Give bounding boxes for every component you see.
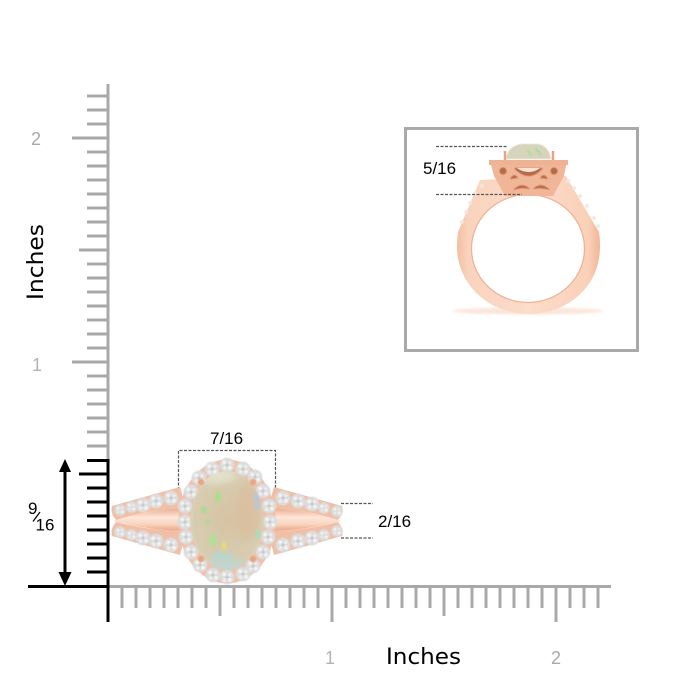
inner band edge: [472, 194, 584, 302]
dimension lines: [436, 146, 522, 194]
axis numbers: 1: [32, 355, 42, 375]
opal stone: [190, 468, 264, 573]
dimension: stone width: 7/16: [210, 429, 243, 448]
halo rim: [489, 160, 568, 165]
gallery arc highlight: [517, 168, 540, 172]
dimension: stone width: [178, 429, 276, 490]
vertical ruler: grey section: [72, 84, 108, 460]
label: ring height 9/16: [28, 499, 54, 534]
arrow: ring height: [58, 459, 72, 586]
label: ring height 9/16: 16: [36, 516, 54, 534]
ring band side view: [457, 176, 600, 314]
axis numbers: 2: [551, 648, 561, 668]
axis numbers: 1: [325, 648, 335, 668]
axis numbers: 2: [31, 129, 41, 149]
side diamonds: [460, 179, 600, 228]
axis numbers: [31, 129, 561, 668]
halo: [178, 458, 277, 584]
split shank, right: [268, 487, 342, 555]
shank diamonds: [114, 491, 343, 552]
horizontal ruler: [108, 586, 611, 622]
prongs: [198, 479, 256, 562]
axis title: horizontal Inches: Inches: [386, 645, 461, 670]
split shank, left: [112, 487, 186, 555]
head gallery: [490, 161, 567, 196]
opal side view: [506, 144, 551, 159]
prongs side view: [505, 151, 553, 161]
label 5/16: 5/16: [423, 159, 456, 178]
main ring: front view: [112, 458, 343, 584]
vertical ruler: black section marking ring height: [28, 459, 108, 622]
label: ring height 9/16: 9: [28, 499, 37, 518]
gallery cutouts: [500, 168, 558, 190]
panel: side view inset: [406, 128, 638, 350]
dimension: band width: [341, 504, 411, 538]
ground shadow: [452, 308, 604, 314]
dimension: band width: 2/16: [378, 512, 411, 531]
axis title: vertical Inches: Inches: [24, 224, 49, 300]
